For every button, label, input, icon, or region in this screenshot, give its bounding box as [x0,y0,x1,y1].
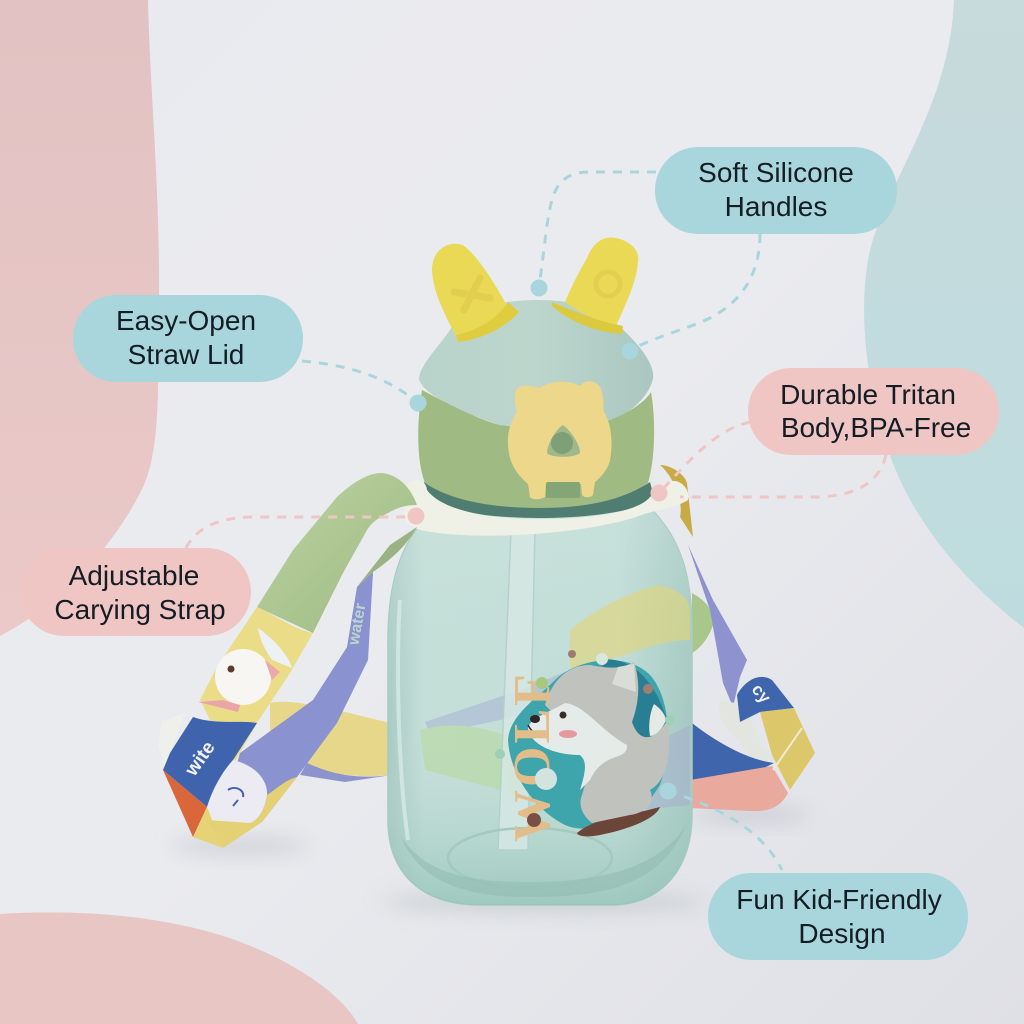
callout: fun kid-friendly design [660,782,968,960]
handle: x [432,244,508,340]
yellow strap section [200,607,313,765]
blue strap section [163,717,257,807]
strap on the left, front of the bottle [163,473,417,848]
lower green fold [357,527,417,587]
callout: soft silicone handles: Handles [725,191,827,222]
callout: durable tritan body [650,368,999,502]
callout: soft silicone handles: Soft Silicone [698,157,854,188]
strap on the right, behind the bottle [660,465,815,811]
callout: adjustable carrying strap: Carying Strap [54,594,226,625]
confetti dots [527,813,541,827]
callout: fun kid-friendly design: Fun Kid-Friendly [736,884,942,915]
purple strap section [235,572,373,822]
callout: durable tritan body: Body,BPA-Free [781,412,971,443]
callout: easy-open straw lid: Straw Lid [128,339,244,370]
bottle body [388,510,692,905]
yellow strap behind, left side [158,702,392,782]
lid top [419,300,653,427]
back strap seen through bottle [420,585,690,810]
callout: soft silicone handles [530,147,897,360]
lid band [418,390,654,508]
bottle lid [418,237,654,508]
strap lettering: wite [181,738,220,781]
callout: durable tritan body: Durable Tritan [780,379,956,410]
straw [498,530,535,850]
ground [577,807,660,836]
callout: easy-open straw lid: Easy-Open [116,305,256,336]
egg face print [207,760,267,823]
callout: easy-open straw lid [73,295,426,412]
callout: adjustable carrying strap [20,508,424,636]
neck ring [404,480,688,536]
callout: adjustable carrying strap: Adjustable [69,560,199,591]
fur [545,662,669,823]
button [508,381,612,499]
wolf lettering: WOLF [504,671,561,842]
handle: o [565,237,638,326]
bunny print [215,649,271,705]
teal badge [508,660,668,829]
strap on the right, behind the bottle: cy [748,680,775,707]
callout: fun kid-friendly design: Design [798,918,886,949]
strap on the left, front of the bottle: water [345,602,370,647]
wolf graphic [495,650,675,842]
green strap section [257,473,417,633]
